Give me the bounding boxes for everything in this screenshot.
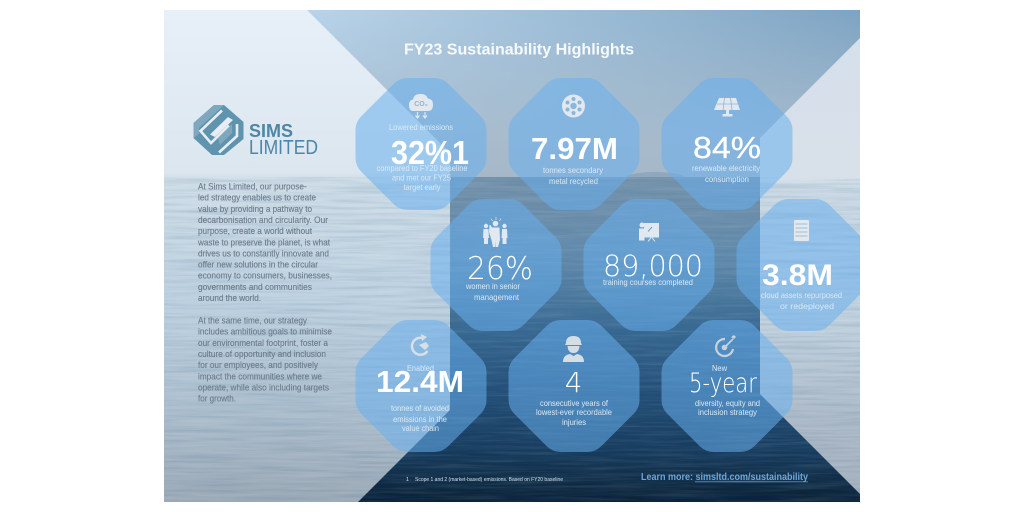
description <box>391 403 449 433</box>
icon: people <box>483 217 508 247</box>
label: Enabled <box>407 363 434 373</box>
metric: 84%: 84% <box>693 130 761 165</box>
description: cloud assets repurposed <box>761 290 842 300</box>
text block: strategy paragraph: impact the communities where we <box>198 371 322 381</box>
text block: strategy paragraph: for growth. <box>198 394 236 404</box>
description <box>761 292 842 310</box>
logo wordmark: SIMS: SIMS <box>249 120 293 141</box>
description: value chain <box>402 423 439 433</box>
description: diversity, equity and <box>695 398 760 408</box>
overlay: pale left shape <box>164 10 450 502</box>
overlay: pale right shape <box>760 38 860 494</box>
label: Lowered emissions <box>389 122 453 132</box>
icon: worker with helmet <box>563 336 584 362</box>
footnote: 1 <box>406 477 409 483</box>
description: tonnes secondary <box>543 165 604 175</box>
logo mark <box>194 105 244 155</box>
text block: purpose paragraph: economy to consumers, businesses, <box>198 271 332 281</box>
metric: 12.4M: 12.4M <box>376 364 464 399</box>
description: injuries <box>562 417 586 427</box>
metric: 4: 4 <box>565 366 582 399</box>
description <box>695 398 760 417</box>
description: target early <box>404 182 441 192</box>
description: consumption <box>705 174 749 184</box>
title: FY23 Sustainability Highlights <box>404 42 634 58</box>
description <box>536 398 612 427</box>
description <box>543 167 603 186</box>
description: consecutive years of <box>540 398 609 408</box>
icon: CO2 cloud: CO₂ <box>414 101 428 108</box>
description <box>466 283 520 302</box>
panel: avoided emissions <box>356 320 486 452</box>
text block: purpose paragraph: drives us to constantly innovate and <box>198 248 329 258</box>
text block: strategy paragraph: At the same time, our strategy <box>198 316 307 326</box>
text block: strategy paragraph: culture of opportunity and inclusion <box>198 349 326 359</box>
icon: target with arrow <box>716 335 736 356</box>
icon: server stack <box>794 220 809 241</box>
description: metal recycled <box>549 176 598 186</box>
footnote: Scope 1 and 2 (market-based) emissions. Based on FY20 baseline <box>415 477 563 483</box>
panel: training courses <box>584 199 714 331</box>
text block: purpose paragraph: waste to preserve the planet, is what <box>197 237 330 247</box>
description: inclusion strategy <box>698 407 758 417</box>
logo: Sims Limited <box>194 105 318 159</box>
link: learn more: Learn more: simsltd.com/sustainability <box>641 472 808 483</box>
text block: purpose paragraph: led strategy enables us to create <box>198 193 316 203</box>
text block: strategy paragraph: includes ambitious goals to minimise <box>198 327 332 337</box>
description: women in senior <box>465 281 520 291</box>
text block: purpose paragraph <box>197 182 332 303</box>
description <box>692 165 760 184</box>
description: management <box>474 292 520 302</box>
icon: recycle loop with leaf <box>412 334 429 355</box>
description <box>376 163 468 192</box>
metric: 32%1: 32%1 <box>391 134 469 171</box>
water texture <box>164 177 860 502</box>
text block: purpose paragraph: decarbonisation and circularity. Our <box>198 215 328 225</box>
text block: purpose paragraph: purpose, create a world without <box>198 226 312 236</box>
text block: purpose paragraph: value by providing a pathway to <box>198 204 312 214</box>
text block: purpose paragraph: offer new solutions in the circular <box>198 260 318 270</box>
metric: 5-year: 5-year <box>689 368 758 399</box>
text block: purpose paragraph: around the world. <box>198 293 261 303</box>
panel: cloud assets <box>736 199 868 331</box>
panel: metal recycled <box>508 78 640 210</box>
description: and met our FY25 <box>392 172 451 182</box>
icon: presenter at board <box>639 222 659 242</box>
background: ocean and sky photo <box>307 10 860 502</box>
icon: bearing wheel <box>562 94 585 118</box>
description: compared to FY20 baseline <box>376 163 468 173</box>
metric: 89,000: 89,000 <box>603 249 703 283</box>
text block: purpose paragraph: governments and communities <box>198 282 312 292</box>
description: tonnes of avoided <box>391 403 449 413</box>
icon: solar panel <box>714 98 740 116</box>
description: renewable electricity <box>692 163 761 173</box>
panel: recordable injuries <box>508 320 640 452</box>
panel: renewable electricity <box>662 78 792 210</box>
text block: purpose paragraph: At Sims Limited, our purpose- <box>198 182 307 192</box>
description: or redeployed <box>780 301 834 311</box>
label: New <box>712 363 728 373</box>
text block: strategy paragraph: for our employees, and positively <box>198 360 318 370</box>
metric: 3.8M: 3.8M <box>762 259 833 292</box>
logo wordmark: LIMITED: LIMITED <box>249 137 318 159</box>
text block: strategy paragraph: our environmental footprint, foster a <box>198 338 328 348</box>
description: lowest-ever recordable <box>536 407 612 417</box>
metric: 7.97M: 7.97M <box>531 131 618 166</box>
description: emissions in the <box>393 414 447 424</box>
panel: lowered emissions <box>356 78 486 210</box>
panel: diversity strategy <box>662 320 792 452</box>
description: training courses completed <box>603 277 693 287</box>
text block: strategy paragraph <box>198 316 332 404</box>
metric: 26%: 26% <box>467 251 533 287</box>
panel: women in senior management <box>430 199 562 331</box>
text block: strategy paragraph: operate, while also including targets <box>198 382 329 392</box>
